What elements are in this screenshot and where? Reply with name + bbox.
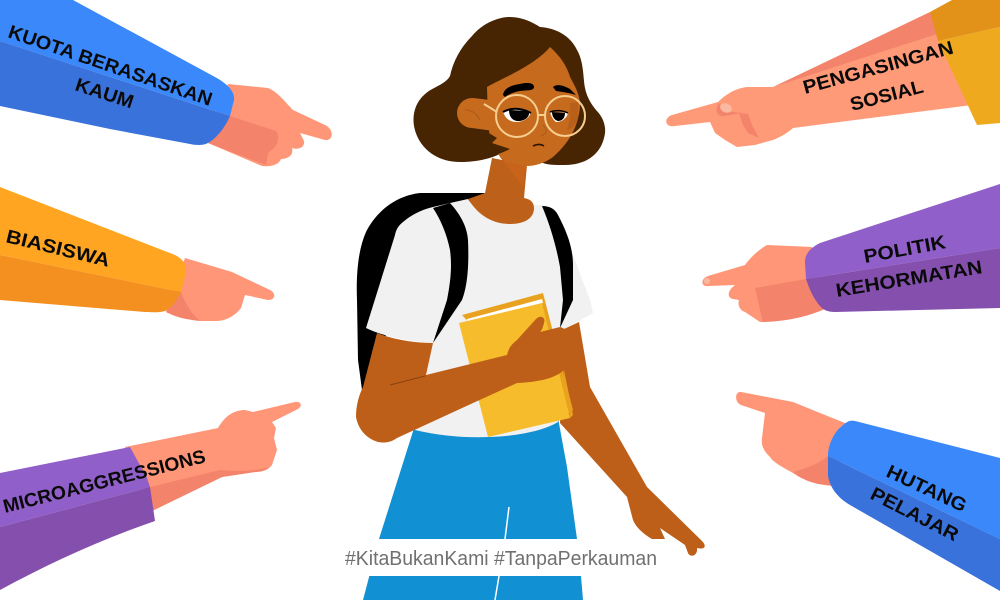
hair lock	[468, 128, 510, 160]
label: hutang pelajar: PELAJAR	[867, 484, 962, 546]
label: politik kehormatan: KEHORMATAN	[834, 257, 984, 302]
backpack straps	[433, 203, 468, 343]
label: politik kehormatan	[834, 232, 984, 302]
glasses	[484, 95, 585, 137]
label: pengasingan sosial	[801, 38, 956, 116]
caption bar with hashtags	[340, 539, 657, 576]
nose and mouth	[541, 125, 546, 136]
backpack	[357, 193, 485, 390]
label: politik kehormatan: POLITIK	[862, 232, 948, 268]
face	[487, 47, 580, 166]
label: kuota berasaskan kaum: KAUM	[72, 75, 136, 113]
arm: middle-right purple pointing hand	[702, 184, 1000, 322]
left arm and hand	[356, 317, 571, 443]
ear	[457, 98, 494, 131]
character: student with backpack and book	[340, 17, 705, 600]
arm: top-right skin arm with orange sleeve	[666, 0, 1000, 147]
right arm	[560, 322, 705, 556]
shorts crease	[495, 507, 509, 600]
hair back	[413, 17, 605, 165]
label: kuota berasaskan kaum: KUOTA BERASASKAN	[5, 22, 215, 111]
arm: top-left blue pointing hand	[0, 0, 332, 166]
label: hutang pelajar	[867, 461, 970, 546]
arm: bottom-right blue pointing hand	[736, 392, 1000, 591]
eyebrows	[503, 83, 534, 97]
shorts	[363, 418, 583, 600]
label: biasiswa: BIASISWA	[4, 226, 112, 272]
eyes	[503, 108, 568, 122]
arm: bottom-left purple pointing hand	[0, 402, 301, 590]
neck	[468, 158, 534, 224]
label: pengasingan sosial: SOSIAL	[848, 77, 926, 116]
caption bar with hashtags: #KitaBukanKami #TanpaPerkauman	[345, 548, 657, 570]
arm: middle-left orange pointing hand	[0, 187, 274, 321]
shirt	[366, 199, 593, 437]
eye shadow patch	[567, 102, 578, 130]
label: microaggressions: MICROAGGRESSIONS	[1, 446, 208, 518]
book	[462, 293, 573, 420]
label: pengasingan sosial: PENGASINGAN	[801, 38, 956, 99]
label: hutang pelajar: HUTANG	[883, 461, 970, 517]
